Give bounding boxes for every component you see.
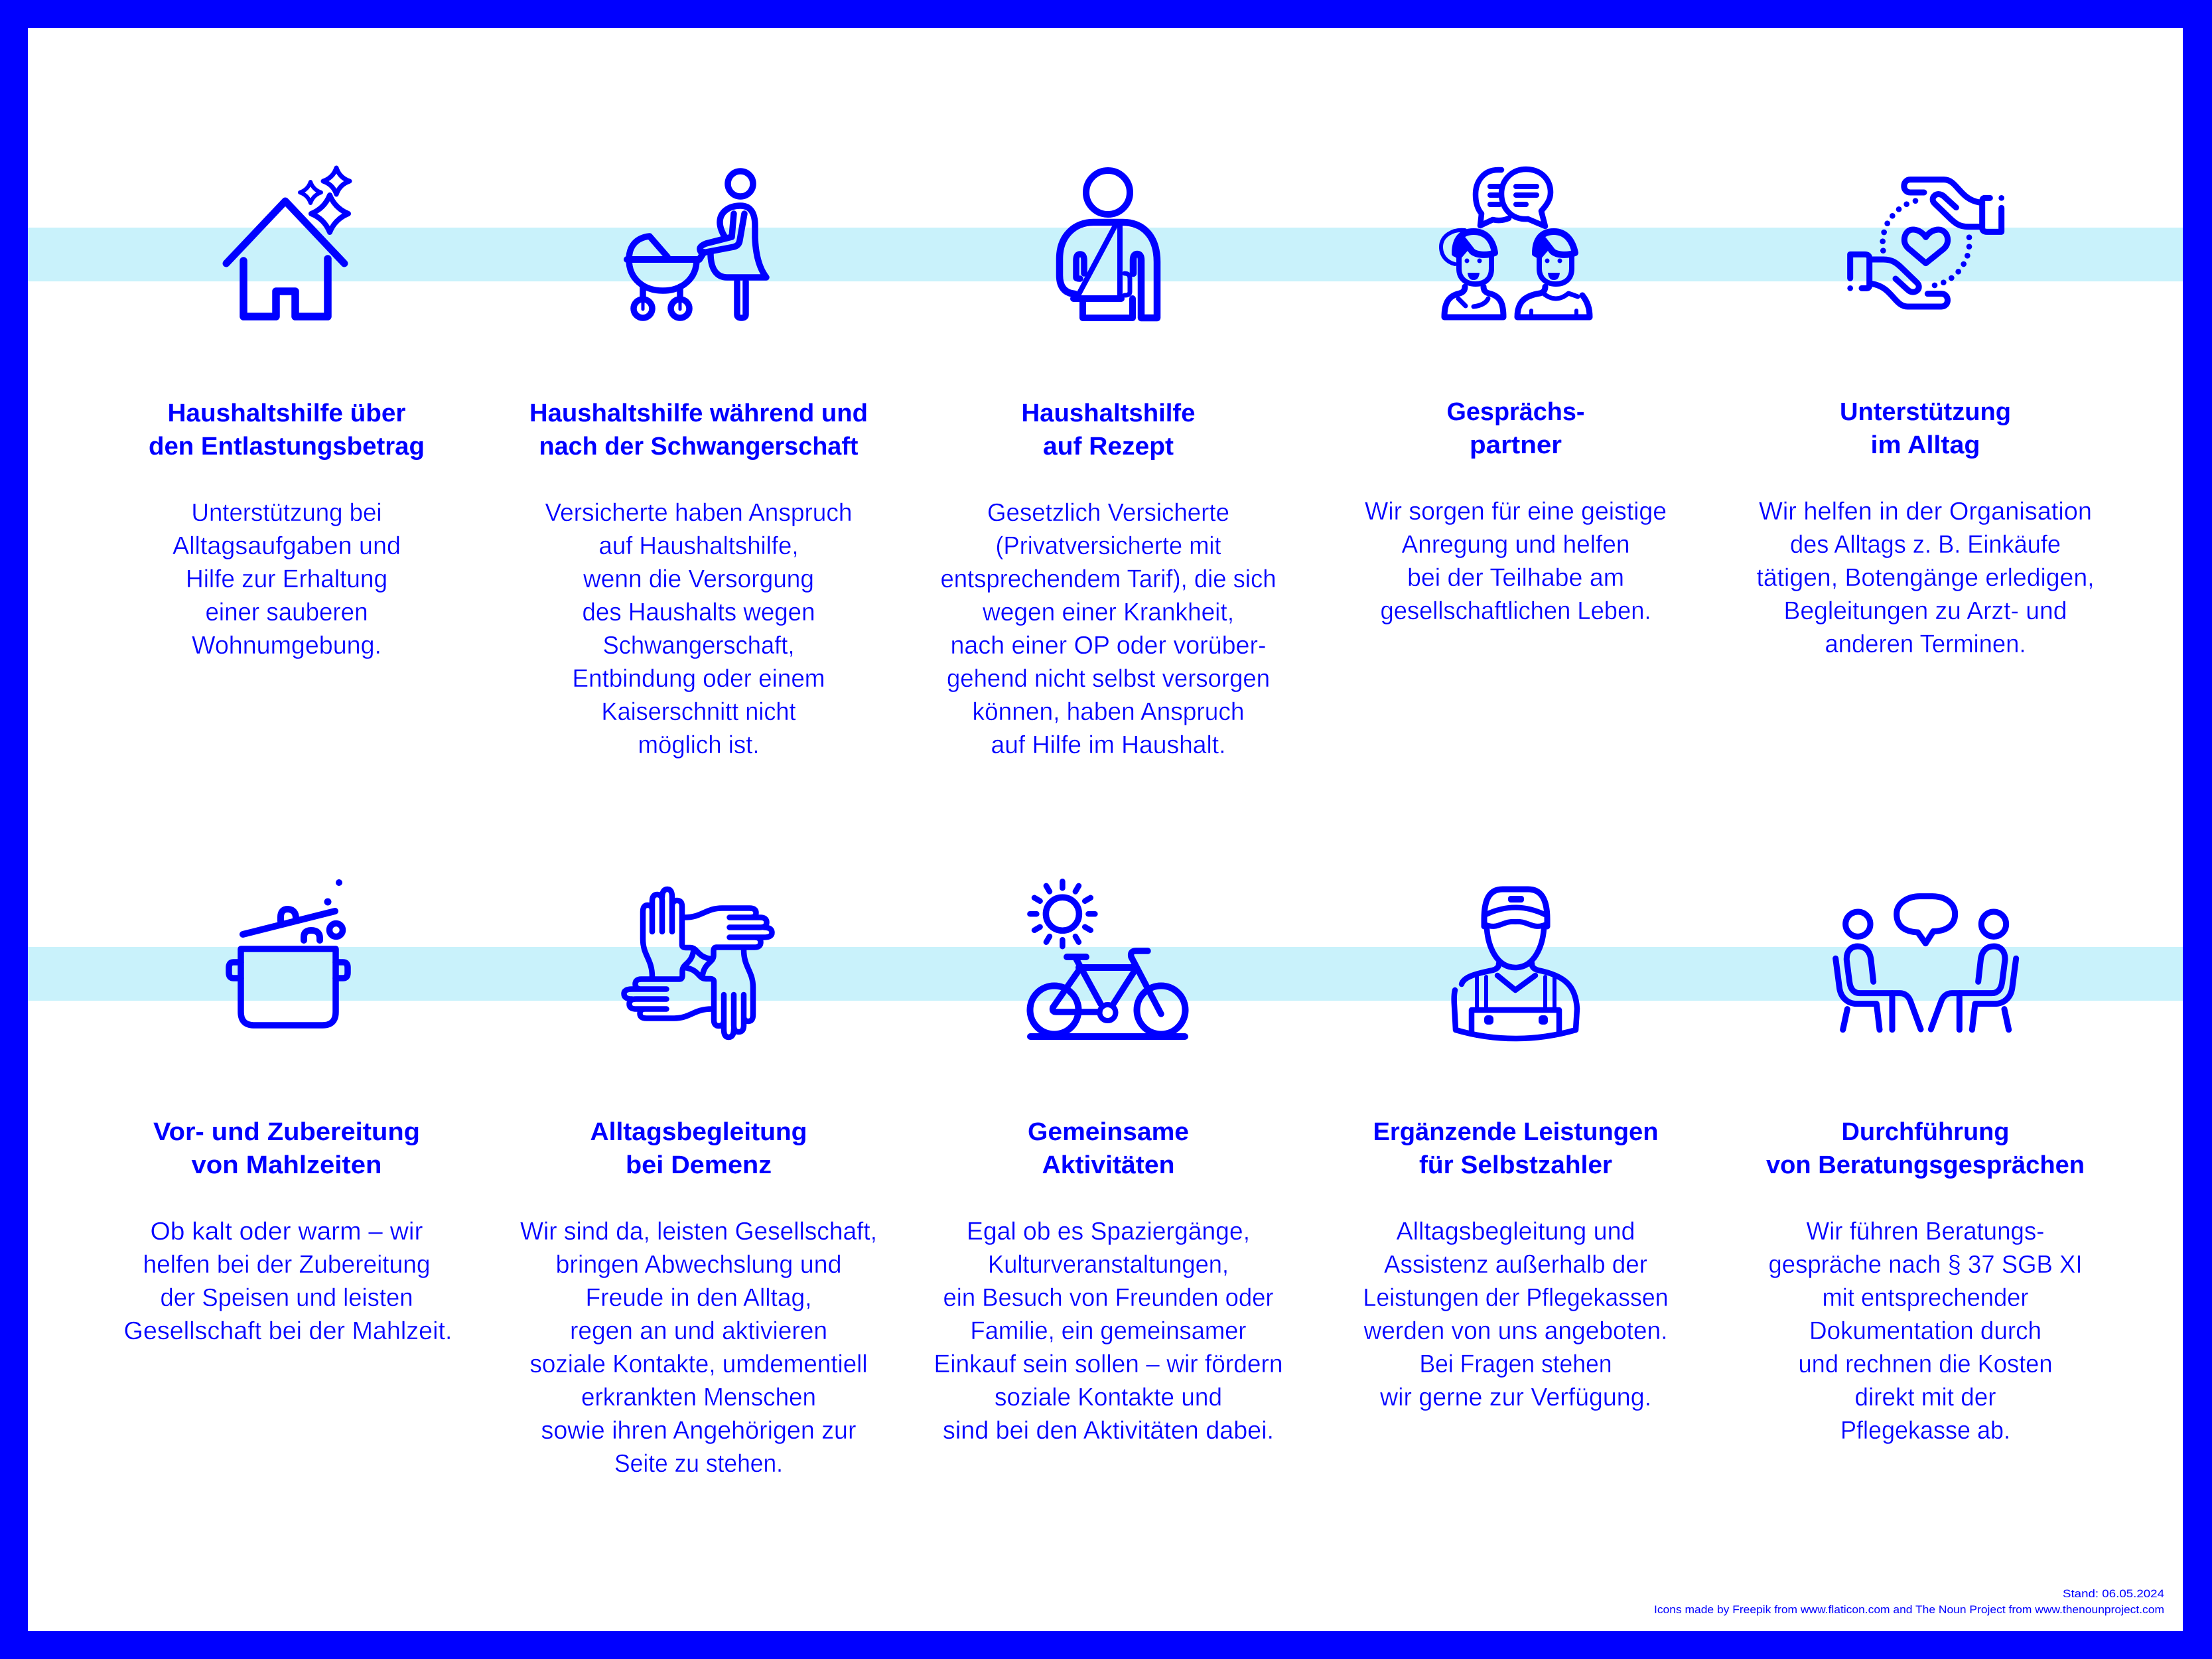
body text: und rechnen die Kosten [1798, 1350, 2053, 1378]
heading: nach der Schwangerschaft [539, 433, 859, 461]
heading: den Entlastungsbetrag [149, 433, 425, 461]
heading [1022, 399, 1196, 461]
body text: entsprechendem Tarif), die sich [941, 565, 1277, 593]
heading: Gemeinsame [1028, 1118, 1189, 1146]
body text: Gesetzlich Versicherte [987, 499, 1229, 527]
body text [1363, 1218, 1668, 1411]
body text: bringen Abwechslung und [556, 1251, 841, 1279]
icon: person with arm sling [1060, 171, 1157, 318]
heading [1766, 1118, 2085, 1179]
body text: regen an und aktivieren [570, 1317, 827, 1345]
body text: nach einer OP oder vorüber- [950, 632, 1266, 660]
body text [1365, 498, 1667, 625]
body text [123, 1218, 452, 1345]
icon: two people at a table [1836, 897, 2016, 1030]
icon: bicycle and sun [1030, 881, 1185, 1037]
body text: einer sauberen [206, 599, 368, 626]
body text: gesellschaftlichen Leben. [1380, 597, 1651, 625]
icon: house with sparkles [226, 168, 350, 317]
body text: ein Besuch von Freunden oder [943, 1284, 1274, 1312]
body text: mit entsprechender [1822, 1284, 2029, 1312]
body text: Wir sind da, leisten Gesellschaft, [520, 1218, 877, 1246]
body text: gehend nicht selbst versorgen [947, 665, 1270, 693]
footer note [1654, 1587, 2164, 1616]
footer note: Icons made by Freepik from www.flaticon.com and The Noun Project from www.thenounproject.com [1654, 1603, 2164, 1616]
panel: Ergänzende Leistungen für Selbstzahler [1363, 889, 1668, 1411]
heading [153, 1118, 420, 1179]
body text: auf Hilfe im Haushalt. [991, 731, 1226, 759]
body text [173, 499, 401, 660]
heading: Durchführung [1842, 1118, 2009, 1146]
heading [149, 399, 425, 461]
body text: wir gerne zur Verfügung. [1379, 1384, 1651, 1411]
heading: von Mahlzeiten [191, 1151, 382, 1179]
heading: Haushaltshilfe [1022, 399, 1196, 427]
heading: Ergänzende Leistungen [1373, 1118, 1659, 1146]
body text: anderen Terminen. [1825, 630, 2026, 658]
heading [1446, 398, 1584, 459]
body text: Schwangerschaft, [602, 632, 795, 660]
body text [1757, 498, 2094, 658]
body text [941, 499, 1277, 759]
panel: Unterstützung im Alltag [1757, 180, 2094, 658]
body text: Entbindung oder einem [572, 665, 825, 693]
body text: gespräche nach § 37 SGB XI [1769, 1251, 2082, 1279]
heading: von Beratungsgesprächen [1766, 1151, 2085, 1179]
heading: auf Rezept [1043, 433, 1174, 461]
panel: Gemeinsame Aktivitäten [934, 881, 1283, 1445]
heading [1840, 398, 2011, 459]
icon: four interlocked hands [624, 889, 772, 1037]
body text: Einkauf sein sollen – wir fördern [934, 1350, 1283, 1378]
body text: helfen bei der Zubereitung [143, 1251, 430, 1279]
body text: Anregung und helfen [1401, 531, 1629, 559]
heading: im Alltag [1871, 431, 1980, 459]
body text [1769, 1218, 2082, 1445]
panel: Alltagsbegleitung bei Demenz [520, 889, 877, 1478]
body text: sind bei den Aktivitäten dabei. [943, 1417, 1274, 1445]
icon: mother with pram [627, 171, 766, 318]
panel: Haushaltshilfe während und nach der Schwangerschaft [529, 171, 868, 759]
heading: Haushaltshilfe über [167, 399, 406, 427]
icon: worker with cap [1454, 889, 1577, 1039]
heading: Aktivitäten [1042, 1151, 1174, 1179]
body text: können, haben Anspruch [973, 698, 1245, 726]
heading: Gesprächs- [1446, 398, 1584, 426]
body text: Freude in den Alltag, [585, 1284, 812, 1312]
panel: Vor- und Zubereitung von Mahlzeiten [123, 879, 452, 1345]
panel: Gesprächspartner [1365, 169, 1667, 625]
heading: Haushaltshilfe während und [529, 399, 868, 427]
body text: (Privatversicherte mit [995, 532, 1221, 560]
icon: hands around heart [1847, 180, 2004, 307]
body text: Alltagsbegleitung und [1396, 1218, 1635, 1246]
heading: Unterstützung [1840, 398, 2011, 426]
body text: Bei Fragen stehen [1420, 1350, 1612, 1378]
body text: soziale Kontakte und [995, 1384, 1222, 1411]
body text: der Speisen und leisten [161, 1284, 413, 1312]
body text: Hilfe zur Erhaltung [186, 565, 387, 593]
body text: tätigen, Botengänge erledigen, [1757, 564, 2094, 592]
body text [520, 1218, 877, 1478]
body text: Pflegekasse ab. [1840, 1417, 2010, 1445]
body text: Wir helfen in der Organisation [1759, 498, 2092, 526]
heading: bei Demenz [626, 1151, 772, 1179]
footer note: Stand: 06.05.2024 [2063, 1587, 2164, 1600]
body text: Seite zu stehen. [614, 1450, 783, 1478]
band: bottom row [28, 947, 2183, 1001]
body text: werden von uns angeboten. [1363, 1317, 1668, 1345]
heading: Alltagsbegleitung [590, 1118, 807, 1146]
body text: Kaiserschnitt nicht [601, 698, 796, 726]
body text: wenn die Versorgung [583, 565, 814, 593]
icon: cooking pot [229, 879, 348, 1025]
body text: des Haushalts wegen [583, 599, 815, 626]
body text: möglich ist. [638, 731, 759, 759]
panel: Durchführung von Beratungsgesprächen [1766, 897, 2085, 1445]
heading [529, 399, 868, 461]
body text: bei der Teilhabe am [1407, 564, 1624, 592]
panel: Haushaltshilfe auf Rezept [941, 171, 1277, 759]
heading [590, 1118, 807, 1179]
body text: wegen einer Krankheit, [982, 599, 1234, 626]
panel: Haushaltshilfe über den Entlastungsbetrag [149, 168, 425, 660]
heading [1028, 1118, 1189, 1179]
body text: des Alltags z. B. Einkäufe [1790, 531, 2061, 559]
icon: two people talking [1441, 169, 1590, 317]
body text: Kulturveranstaltungen, [988, 1251, 1229, 1279]
body text: auf Haushaltshilfe, [598, 532, 799, 560]
body text: Assistenz außerhalb der [1384, 1251, 1647, 1279]
body text: Familie, ein gemeinsamer [970, 1317, 1247, 1345]
body text: sowie ihren Angehörigen zur [541, 1417, 857, 1445]
body text: Egal ob es Spaziergänge, [967, 1218, 1250, 1246]
body text: Wir sorgen für eine geistige [1365, 498, 1667, 526]
body text: erkrankten Menschen [581, 1384, 816, 1411]
body text: Wohnumgebung. [192, 632, 381, 660]
body text: Versicherte haben Anspruch [545, 499, 852, 527]
heading: für Selbstzahler [1419, 1151, 1612, 1179]
body text [934, 1218, 1283, 1445]
heading [1373, 1118, 1659, 1179]
body text: Unterstützung bei [191, 499, 382, 527]
body text: soziale Kontakte, umdementiell [529, 1350, 868, 1378]
body text: Alltagsaufgaben und [173, 532, 401, 560]
body text: Begleitungen zu Arzt- und [1783, 597, 2067, 625]
heading: Vor- und Zubereitung [153, 1118, 420, 1146]
body text [545, 499, 852, 759]
body text: Dokumentation durch [1809, 1317, 2041, 1345]
body text: direkt mit der [1855, 1384, 1996, 1411]
band: top row [28, 228, 2183, 281]
heading: partner [1470, 431, 1562, 459]
body text: Ob kalt oder warm – wir [150, 1218, 423, 1246]
body text: Leistungen der Pflegekassen [1363, 1284, 1668, 1312]
body text: Gesellschaft bei der Mahlzeit. [123, 1317, 452, 1345]
body text: Wir führen Beratungs- [1806, 1218, 2045, 1246]
